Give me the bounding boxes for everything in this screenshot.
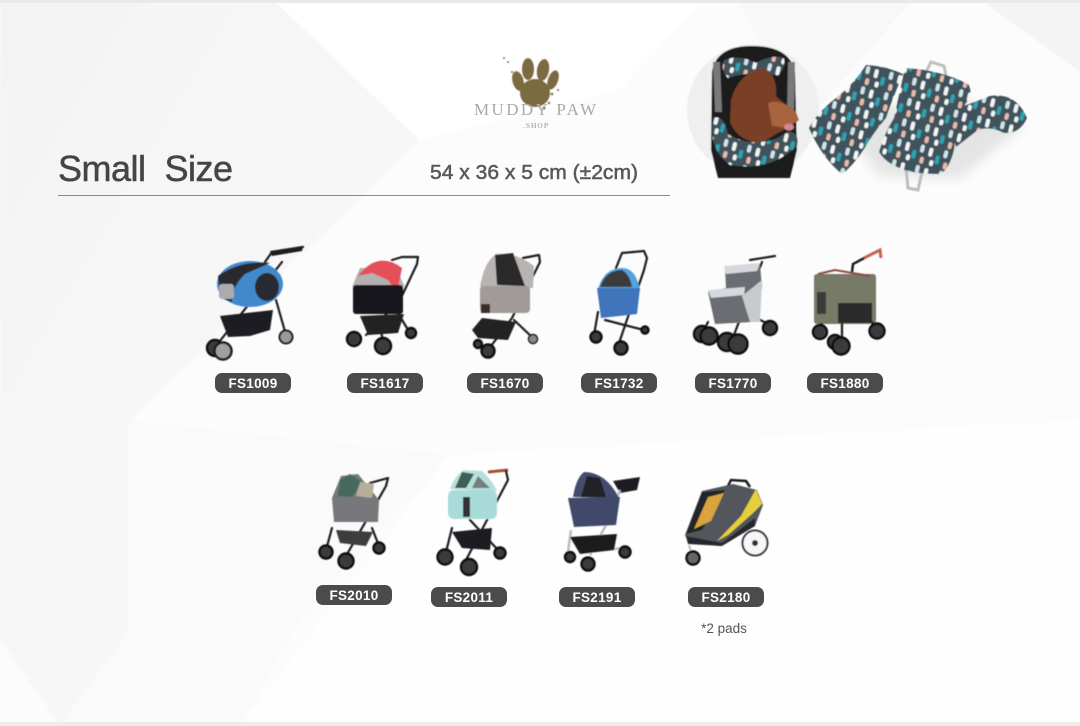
label FS1670: FS1670 <box>480 376 530 391</box>
dimensions: 54 x 36 x 5 cm (±2cm) <box>430 162 638 184</box>
stroller FS1770 <box>694 256 777 393</box>
stroller FS2010 <box>316 474 392 605</box>
label FS1880: FS1880 <box>820 376 870 391</box>
label FS1770: FS1770 <box>708 376 758 391</box>
stroller FS1617 <box>347 257 423 393</box>
photo: pads <box>809 62 1027 190</box>
logo: Muddy Paw <box>474 57 597 130</box>
brand name: MUDDY PAW <box>474 100 597 119</box>
label FS2191: FS2191 <box>572 590 622 605</box>
label FS2180 <box>688 587 764 607</box>
bolster pad <box>946 95 1027 147</box>
trailer FS2180 <box>685 480 768 636</box>
headrest pad <box>723 57 784 78</box>
stroller FS2191 <box>559 472 640 607</box>
flat pad <box>809 65 903 174</box>
seat bolster pad <box>712 117 798 166</box>
note: 2 pads: *2 pads <box>701 621 747 636</box>
stroller FS1732 <box>581 251 657 393</box>
label FS1617: FS1617 <box>360 376 410 391</box>
title: Small Size <box>58 148 233 189</box>
stroller FS1880 <box>807 250 884 393</box>
label FS1732 <box>581 373 657 393</box>
label FS1732: FS1732 <box>594 376 644 391</box>
grey circle backdrop <box>687 44 819 176</box>
label FS2010: FS2010 <box>329 588 379 603</box>
domain: .SHOP <box>523 121 549 130</box>
icon: muddy paw print <box>503 57 561 110</box>
label FS1009: FS1009 <box>228 376 278 391</box>
label FS1009 <box>215 373 291 393</box>
stroller FS2011 <box>431 470 508 607</box>
folded pad <box>879 68 970 174</box>
dog <box>730 68 799 143</box>
straps <box>906 62 947 190</box>
stroller FS1670 <box>467 253 543 393</box>
title rule <box>58 195 670 196</box>
label FS2180: FS2180 <box>701 590 751 605</box>
stroller frame <box>711 46 797 178</box>
label FS1880 <box>807 373 883 393</box>
label FS2011: FS2011 <box>445 590 493 605</box>
stroller FS1009 <box>207 246 303 393</box>
pad shadow <box>830 100 1025 178</box>
photo: dog in stroller with pad <box>687 44 819 178</box>
